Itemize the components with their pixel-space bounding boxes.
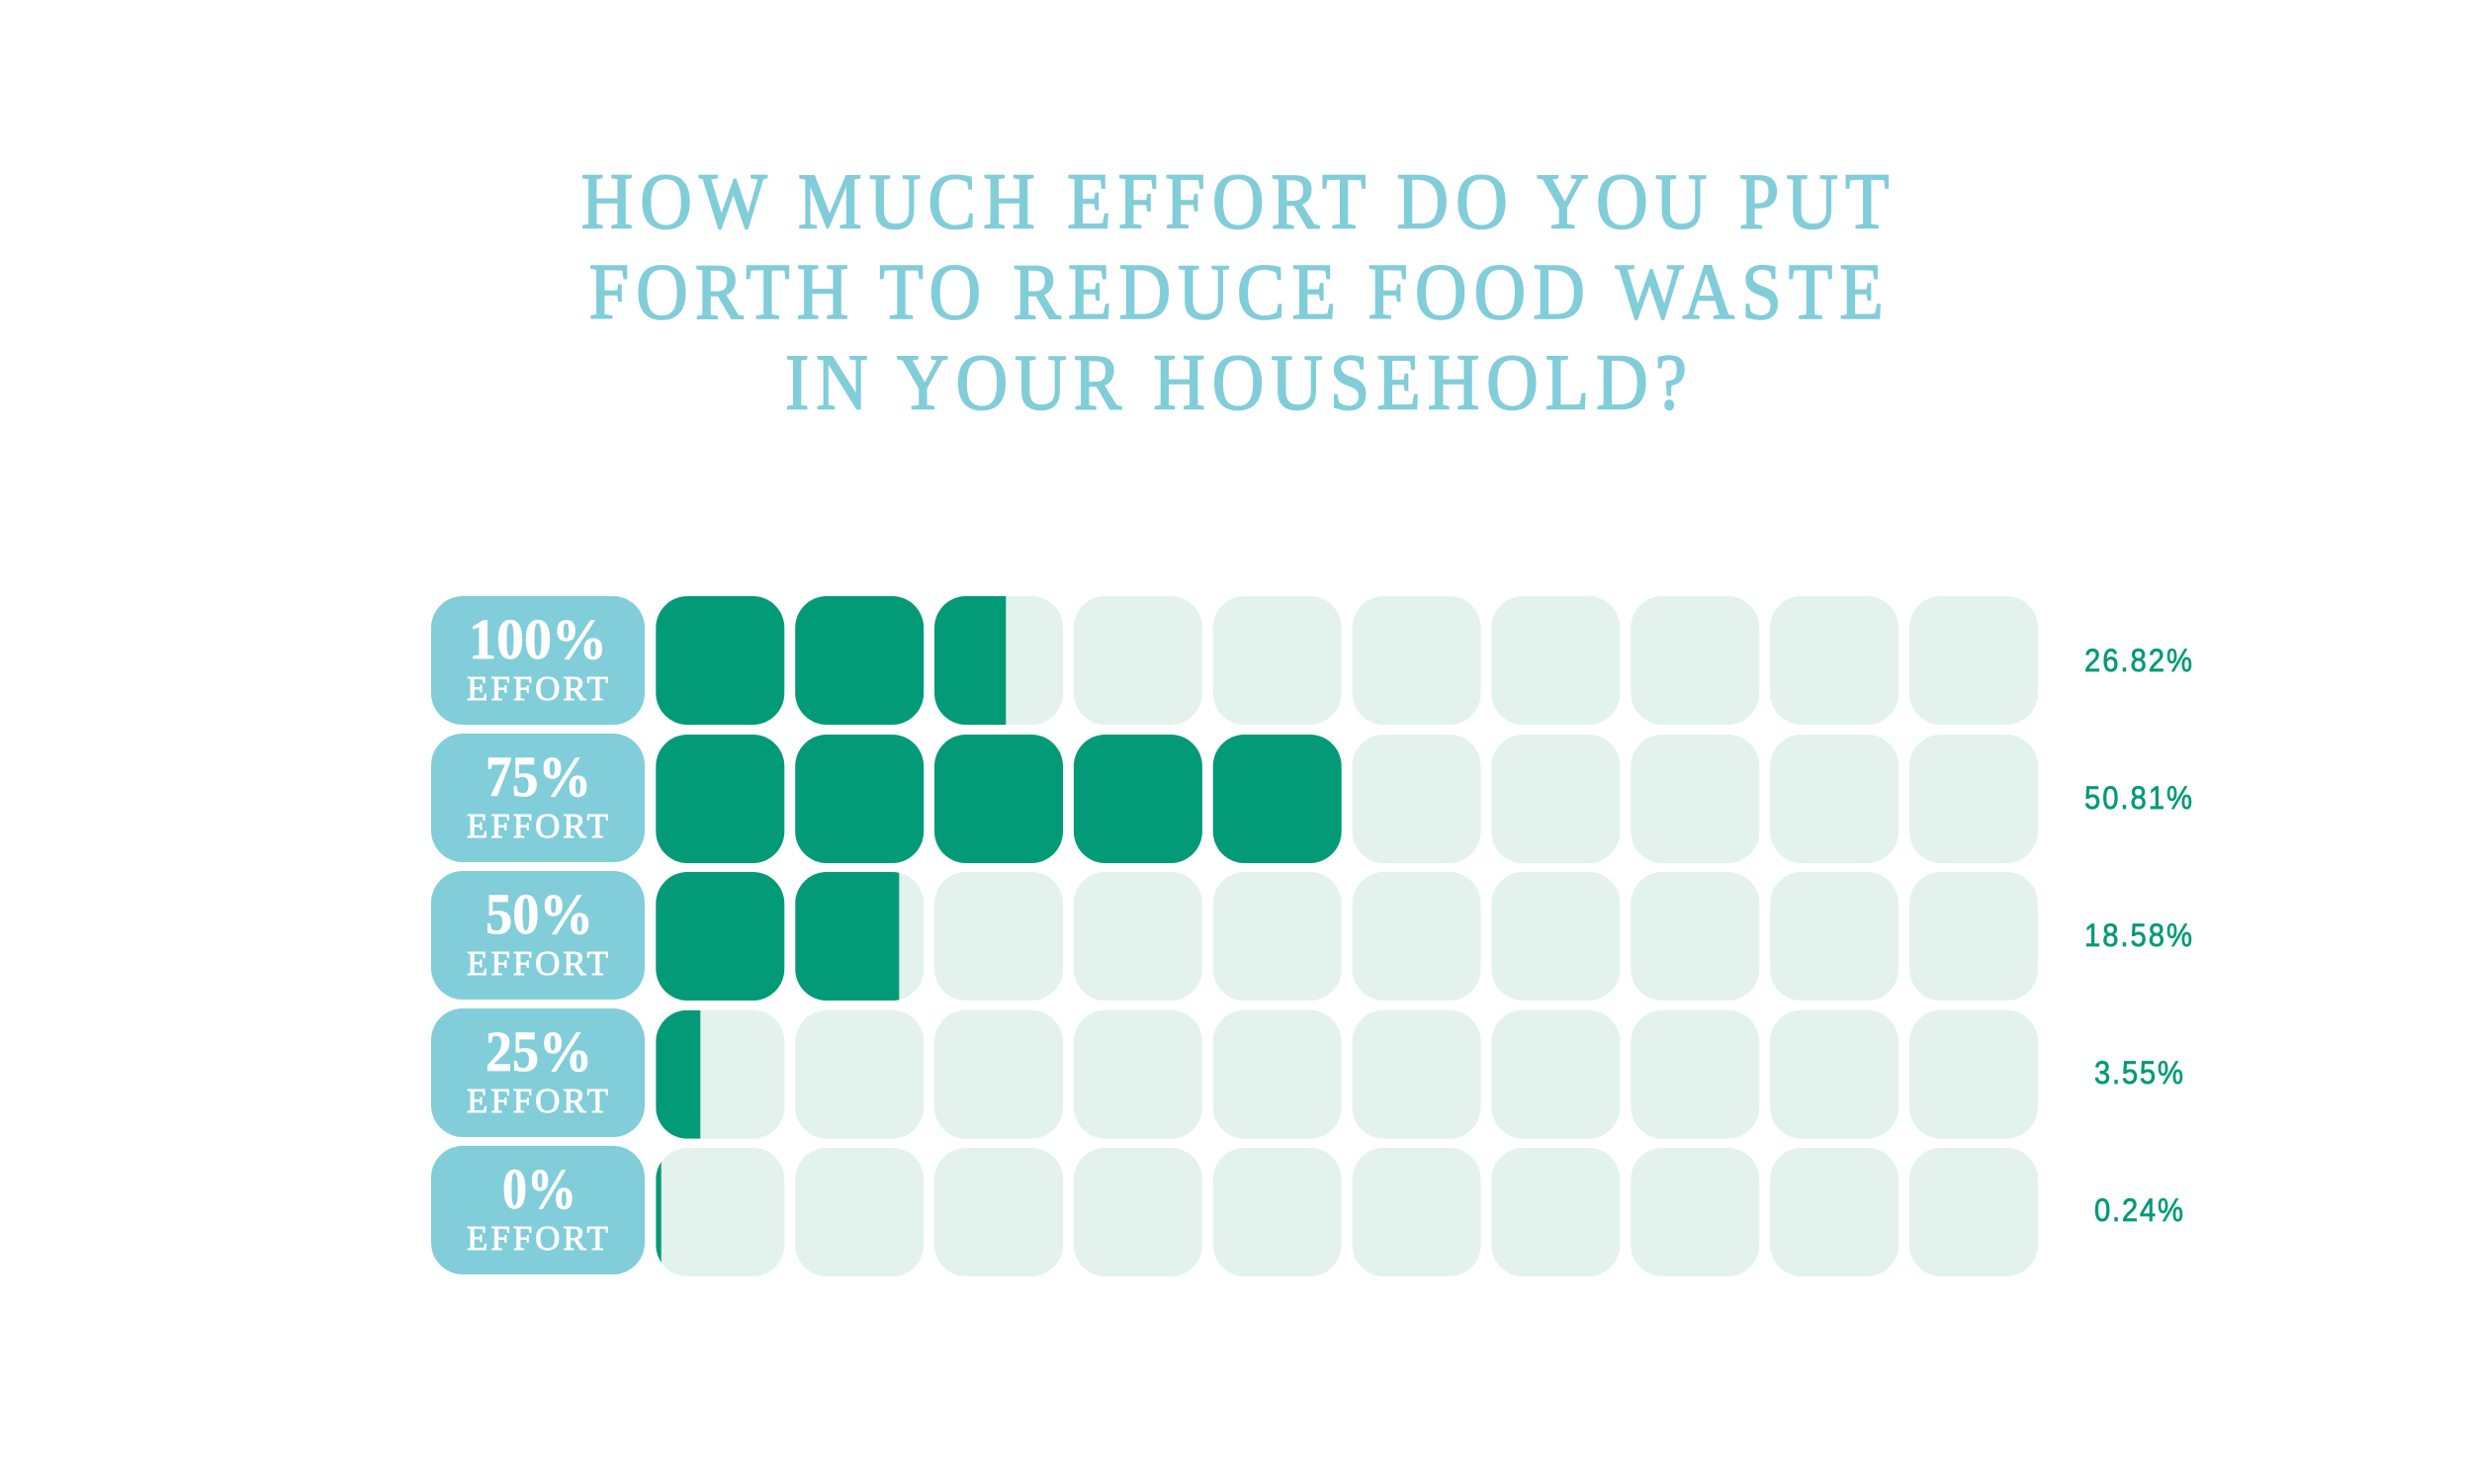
label: 25% effort: EFFORT	[467, 1082, 608, 1120]
label: 0% effort: 0%	[502, 1157, 576, 1221]
tiles: 26.82% filled	[656, 596, 2038, 725]
tiles: 18.58% filled	[656, 872, 2038, 1001]
title: IN YOUR HOUSEHOLD?	[785, 337, 1687, 427]
row: 100% effort	[431, 596, 2192, 725]
tiles: 50.81% filled	[656, 735, 2038, 863]
label: 0% effort: EFFORT	[467, 1219, 608, 1258]
row: 25% effort	[431, 1008, 2183, 1139]
row: 0% effort	[431, 1146, 2183, 1276]
label: 75% effort	[431, 734, 645, 862]
label: 75% effort: 75%	[486, 744, 591, 809]
label: 50% effort: EFFORT	[467, 944, 608, 983]
label: 100% effort: 100%	[469, 607, 607, 671]
label: 50% effort: 50%	[486, 882, 593, 946]
value: 3.55%: 3.55%	[2094, 1055, 2183, 1091]
row: 50% effort	[431, 871, 2192, 1001]
value: 0.24%: 0.24%	[2094, 1192, 2183, 1228]
tiles: 0.24% filled	[656, 1148, 2038, 1276]
row: 75% effort	[431, 734, 2192, 863]
tiles: 3.55% filled	[656, 1010, 2038, 1139]
value: 18.58%: 18.58%	[2084, 917, 2192, 953]
title: FORTH TO REDUCE FOOD WASTE	[589, 246, 1884, 336]
title	[581, 156, 1890, 427]
value: 26.82%: 26.82%	[2084, 643, 2192, 678]
label: 50% effort	[431, 871, 645, 1000]
label: 100% effort: EFFORT	[467, 669, 608, 708]
label: 75% effort: EFFORT	[467, 807, 608, 845]
label: 0% effort	[431, 1146, 645, 1274]
title: HOW MUCH EFFORT DO YOU PUT	[581, 156, 1890, 245]
label: 25% effort: 25%	[486, 1019, 592, 1084]
label: 100% effort	[431, 596, 645, 725]
label: 25% effort	[431, 1008, 645, 1137]
value: 50.81%: 50.81%	[2084, 780, 2192, 816]
